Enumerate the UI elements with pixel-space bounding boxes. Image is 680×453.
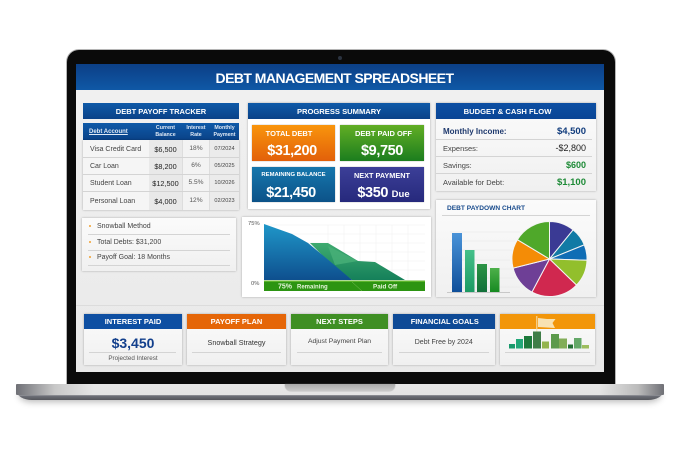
heading: payoff plan (187, 314, 286, 329)
card: debt paid off: $9,750 (361, 142, 403, 158)
row: savings: Savings: (443, 160, 472, 170)
webcam (338, 56, 342, 60)
row: car: $8,200 (154, 162, 177, 170)
axis label: 75%: 75% (248, 221, 260, 227)
icon: flag and bars (509, 316, 589, 348)
title: DEBT MANAGEMENT SPREADSHEET (216, 70, 453, 86)
bar and pie chart (447, 222, 587, 296)
row: personal: Personal Loan (90, 198, 135, 205)
row: monthly income: Monthly Income: (443, 126, 507, 136)
heading: progress summary (248, 103, 430, 119)
laptop screen (76, 64, 604, 372)
card: next payment: NEXT PAYMENT (354, 171, 410, 180)
title (76, 64, 604, 90)
heading: budget and cash flow (436, 103, 596, 119)
caption: projected interest: Projected Interest (108, 355, 158, 362)
row: savings: $600 (566, 160, 586, 170)
heading: debt paydown chart: DEBT PAYDOWN CHART (447, 204, 525, 212)
row: visa: 18% (189, 145, 203, 152)
table header: Current (156, 125, 175, 131)
card: debt paid off (340, 125, 424, 161)
card: remaining balance: $21,450 (266, 184, 316, 200)
table header: Monthly (214, 125, 235, 131)
card: payoff plan (187, 314, 286, 365)
row: monthly income: $4,500 (557, 126, 586, 136)
row: expenses (443, 143, 586, 153)
laptop lid (67, 50, 615, 385)
row: student: 10/2026 (214, 180, 235, 186)
card: next payment: $350 Due (357, 184, 410, 200)
row: student: $12,500 (152, 178, 179, 188)
value: 3,450: $3,450 (112, 335, 154, 351)
text: debt free by 2024: Debt Free by 2024 (415, 338, 473, 346)
row: visa: 07/2024 (214, 146, 235, 152)
row: car: Car Loan (90, 163, 119, 170)
panel: budget and cash flow (436, 103, 596, 191)
row: visa: Visa Credit Card (90, 146, 141, 153)
table header (83, 123, 239, 140)
row: available for debt: Available for Debt: (443, 178, 504, 186)
card: remaining balance: REMAINING BALANCE (261, 172, 326, 178)
list item: snowball method: Snowball Method (97, 222, 151, 230)
heading: progress summary: PROGRESS SUMMARY (297, 107, 381, 116)
heading: next steps (291, 314, 388, 329)
text: snowball strategy: Snowball Strategy (208, 338, 265, 346)
heading: payoff plan: PAYOFF PLAN (211, 317, 262, 326)
bar series (447, 233, 510, 292)
table header: Debt Account (89, 128, 128, 134)
row: student: 5.5% (188, 179, 204, 186)
heading: next steps: NEXT STEPS (316, 317, 363, 326)
pie chart (512, 222, 587, 297)
row: monthly income (443, 126, 586, 136)
row: personal: $4,000 (154, 196, 177, 206)
list item: total debts: Total Debts: $31,200 (97, 238, 161, 246)
card: remaining balance (252, 167, 335, 202)
row: personal: 12% (189, 197, 203, 204)
table header: Interest (186, 125, 206, 131)
heading: debt payoff tracker: DEBT PAYOFF TRACKER (116, 107, 206, 116)
panel: area chart (242, 217, 431, 297)
laptop base (16, 384, 664, 400)
row: car (90, 162, 235, 170)
table header: Balance (155, 132, 176, 138)
table rows (83, 140, 239, 210)
row: available for debt: $1,100 (557, 176, 586, 188)
row: car: 6% (191, 162, 201, 169)
table header: Rate (190, 132, 202, 138)
card: total debt (252, 125, 335, 161)
row: visa (90, 144, 235, 154)
heading: interest paid (84, 314, 182, 329)
heading: budget and cash flow: BUDGET & CASH FLOW (464, 107, 551, 116)
row: available for debt (443, 176, 586, 188)
row: visa: $6,500 (154, 144, 177, 154)
table header: Payment (213, 132, 236, 138)
base side shading (16, 384, 664, 395)
card: goal flag and mini bars (500, 314, 595, 365)
panel: debt paydown chart (436, 200, 596, 297)
row: savings (443, 160, 586, 170)
heading: financial goals: FINANCIAL GOALS (411, 317, 479, 326)
row: student (90, 178, 235, 188)
progress band: 75% (278, 284, 293, 290)
progress band: Paid Off (373, 283, 398, 290)
list item: payoff goal: Payoff Goal: 18 Months (97, 254, 170, 260)
panel: method list (82, 218, 236, 271)
area chart (264, 224, 425, 291)
row: personal: 02/2023 (214, 198, 235, 204)
progress band (264, 280, 425, 291)
axis label: 0%: 0% (251, 281, 259, 287)
card: total debt: TOTAL DEBT (266, 129, 312, 138)
card: financial goals (392, 314, 495, 365)
row: personal (90, 196, 235, 206)
heading: financial goals (392, 314, 495, 329)
row: student: Student Loan (90, 180, 132, 187)
row: expenses: Expenses: (443, 144, 478, 152)
row: expenses: -$2,800 (555, 143, 586, 153)
card: debt paid off: DEBT PAID OFF (355, 129, 412, 138)
card: next steps (291, 314, 388, 365)
progress band: Remaining (297, 284, 328, 290)
panel: debt payoff tracker (82, 103, 240, 212)
card: interest paid (84, 314, 182, 365)
card: next payment (340, 167, 424, 202)
card: total debt: $31,200 (267, 142, 317, 158)
text: adjust payment plan: Adjust Payment Plan (308, 338, 371, 344)
trackpad notch (285, 384, 395, 391)
heading band (500, 314, 595, 329)
panel: progress summary (248, 103, 430, 209)
heading: debt payoff tracker (83, 103, 239, 119)
heading: interest paid: INTEREST PAID (105, 317, 161, 326)
row: car: 05/2025 (214, 162, 235, 168)
